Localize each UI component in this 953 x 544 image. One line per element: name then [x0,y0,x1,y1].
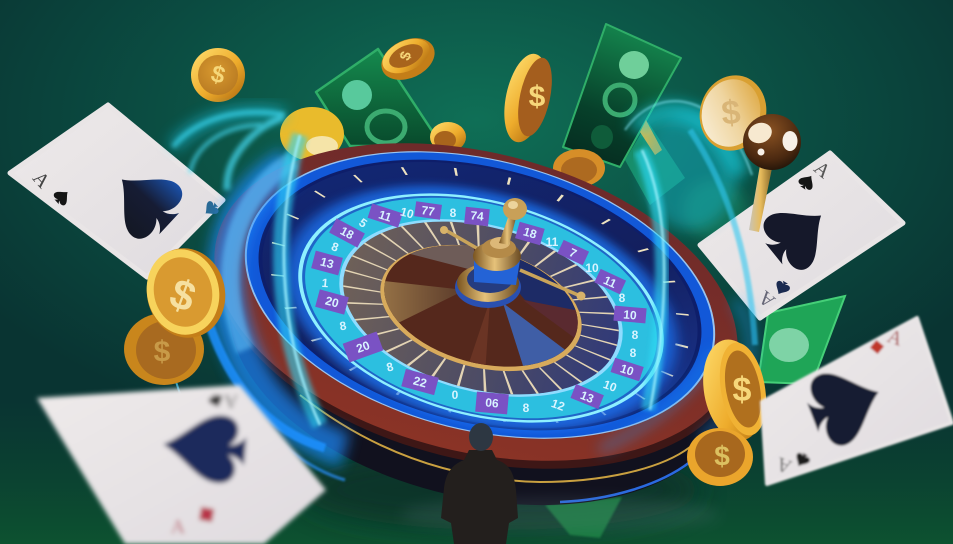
number pockets: 12 [549,396,567,414]
wheel hub cone [384,245,578,367]
coin: top middle tall: $ [529,80,546,114]
banknote: faded right [625,120,685,205]
card pip lower [792,451,812,470]
card spade [799,357,892,452]
card letter lower: A [754,286,780,312]
number pockets: 18 [338,224,356,242]
post base [455,266,521,308]
wheel side wood [182,100,772,520]
number pockets: 8 [632,328,639,342]
coin: large left [124,313,204,385]
number pockets: 8 [523,401,530,415]
person silhouette [441,423,518,544]
coin: large left: $ [154,336,171,368]
number pockets: 06 [485,395,500,411]
number pockets: 8 [329,239,341,255]
number pockets: 10 [585,261,599,275]
number pockets: 77 [420,203,436,219]
card letter: A [28,167,54,193]
post stem [499,212,517,245]
coin: top center [375,30,441,88]
coin: front right [696,335,773,445]
roulette wheel [214,143,738,461]
card pip [796,171,818,192]
number pockets: 8 [385,359,395,375]
glow right [625,101,755,440]
number pockets: 20 [354,338,372,356]
card letter lower: A [171,516,186,538]
person body [441,450,518,544]
wheel outer wood rim [181,92,771,512]
banknote: upper right [563,24,681,167]
number pockets: 10 [399,205,416,222]
banknote: right behind wheel [758,296,845,384]
card spade [754,190,841,279]
card spade [160,411,248,485]
number pockets: 8 [450,206,457,220]
arm right [520,270,586,300]
number pockets: 18 [522,224,539,242]
number pockets: 10 [601,377,619,395]
lever stick [749,165,772,232]
banknote: bottom faded [545,497,622,538]
card pip lower [201,199,221,219]
number pockets: 10 [623,307,638,323]
wheel base blue trim [560,462,690,502]
number pockets: 8 [630,346,637,360]
number pockets: 13 [578,388,596,406]
coin: lower right [687,428,753,486]
glow lower [600,350,715,450]
card: top left [10,105,223,277]
card pip lower [772,279,792,298]
card: right top [700,153,903,318]
coin: pale top right [691,68,775,158]
coins behind wheel [280,107,605,187]
coin: front left [138,241,234,345]
number pockets: 11 [546,235,559,249]
number ring glow [258,145,704,471]
smoke at base [400,497,720,533]
card: right bottom [762,318,952,484]
number pockets: 0 [452,388,459,402]
number ring [273,156,689,460]
number pockets: 11 [601,273,619,291]
number pockets: 74 [470,208,485,224]
banknote: upper center-left [316,49,442,146]
blue glow swirls [170,101,755,480]
coin: top middle tall [497,50,558,146]
lever ball [743,114,801,170]
number pockets: 13 [319,255,336,272]
banknote: faded behind right card [683,180,747,240]
coin: lower right: $ [714,440,730,472]
card pip [51,186,73,208]
number pockets: 22 [412,374,429,391]
number pockets: 11 [377,207,394,225]
number pockets [311,201,647,415]
card letter: A [884,325,906,351]
coin: behind wheel left [280,107,344,161]
coin: top left [191,48,245,102]
card pip [208,393,225,409]
coin: front right: $ [733,371,752,409]
card letter: A [809,157,835,183]
coin: front left: $ [164,269,202,321]
wheel base gold trim [300,395,690,482]
card spade [98,154,193,249]
coin: top left: $ [208,60,229,90]
card letter lower: A [773,452,795,478]
coin: behind wheel center [430,122,466,152]
card letter: A [223,390,238,412]
dark wheel base [198,149,762,544]
person head [469,423,493,451]
coin: top center: $ [397,49,416,63]
wheel dish [214,105,746,485]
card pip [870,340,884,354]
coin: behind wheel right [553,149,605,187]
card pip lower [199,507,214,522]
number pockets: 8 [338,318,348,333]
number pockets: 5 [356,215,370,231]
card: bottom left blurred [37,385,326,544]
number pockets: 8 [619,291,626,305]
center post [440,198,586,308]
number pockets: 20 [324,294,341,311]
pin lever [743,114,801,232]
number pockets: 7 [567,245,579,261]
glow left [170,112,345,480]
number pockets: 1 [321,276,329,290]
number pockets: 10 [618,361,636,379]
coin: pale top right: $ [720,93,742,133]
arm left [440,226,480,250]
